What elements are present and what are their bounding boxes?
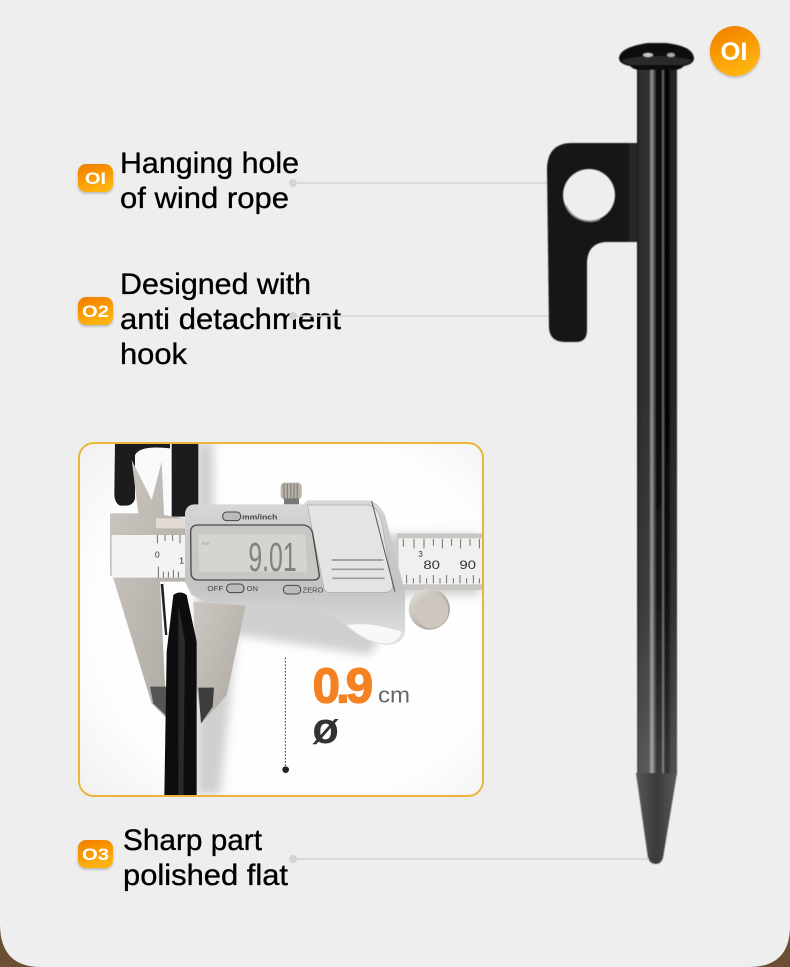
movable jaw: [193, 602, 246, 723]
stake head: [619, 43, 694, 70]
wheel: [409, 588, 450, 630]
callout 01: hanging hole: [78, 147, 548, 215]
text: sharp part polished flat: [123, 824, 289, 892]
caliper photo: [110, 442, 483, 797]
caliper buttons and labels: ZERO: [303, 586, 324, 595]
caliper body: [185, 500, 405, 645]
shaft: [636, 64, 677, 775]
right beam: 3: [418, 550, 423, 559]
badge 01: [78, 164, 113, 192]
diameter symbol: ø: [312, 705, 339, 753]
badge 02: O2: [82, 302, 109, 321]
badge: number 01 circle: OI: [720, 38, 748, 66]
leader line 02: [289, 312, 550, 320]
hook top: [114, 442, 170, 506]
caliper buttons and labels: [207, 512, 324, 595]
hook plate with hole: [547, 143, 640, 342]
caliper buttons and labels: mm/inch: [242, 513, 278, 522]
right beam: 80: [423, 558, 440, 572]
text: sharp part polished flat: polished flat: [123, 859, 289, 892]
caliper photo: 0: [155, 550, 160, 560]
jaw tips: [150, 686, 166, 716]
LCD reading: 9.01: [248, 534, 297, 580]
dotted dimension line: [282, 658, 289, 773]
jaw slot: [156, 518, 186, 528]
badge: number 01 circle: [710, 26, 760, 76]
grip lines: [332, 560, 385, 578]
diameter value: 0.9: [313, 658, 372, 713]
leader line 03: [289, 855, 649, 863]
caliper cover plate: [307, 505, 393, 592]
text: designed with anti detachment hook: anti detachment: [120, 303, 342, 336]
callout 02: anti detachment hook: [78, 268, 550, 371]
leader line 01: [289, 179, 548, 187]
caliper photo: mm: [202, 541, 210, 546]
text: designed with anti detachment hook: Designed with: [120, 268, 311, 301]
caliper buttons and labels: ON: [247, 584, 258, 593]
tapered tip: [636, 773, 677, 864]
stake top: [172, 442, 198, 517]
text: designed with anti detachment hook: hook: [120, 338, 188, 371]
hook weld: [629, 143, 637, 242]
fixed jaw body: [110, 460, 185, 718]
LCD screen: [198, 534, 307, 572]
right beam: 90: [459, 558, 476, 572]
text: sharp part polished flat: Sharp part: [123, 824, 263, 857]
caliper buttons and labels: OFF: [207, 584, 224, 593]
shaft lower sheen: [636, 400, 677, 775]
badge 01: OI: [85, 169, 106, 188]
diameter value: cm: [378, 682, 410, 707]
caliper photo: 1: [179, 555, 184, 565]
hole rim highlight: [566, 206, 600, 221]
scale marks: [157, 535, 180, 578]
panel border: [79, 443, 483, 796]
text: hanging hole of wind rope: Hanging hole: [120, 147, 299, 180]
shadow: [197, 442, 480, 795]
knob: [281, 483, 302, 504]
lower stake: [164, 592, 197, 797]
LCD frame: [191, 525, 319, 580]
badge 03: O3: [82, 845, 109, 864]
text: hanging hole of wind rope: of wind rope: [120, 182, 289, 215]
badge 03: [78, 840, 113, 868]
lower body highlight: [347, 624, 402, 643]
panel: caliper measurement: [79, 442, 483, 797]
text: designed with anti detachment hook: [120, 268, 342, 371]
scale band: [112, 535, 187, 578]
text: hanging hole of wind rope: [120, 147, 299, 215]
badge 02: [78, 297, 113, 325]
callout 03: sharp part: [78, 824, 649, 892]
diameter value: [314, 668, 408, 704]
tent stake: [547, 43, 694, 864]
right beam: [397, 533, 483, 590]
